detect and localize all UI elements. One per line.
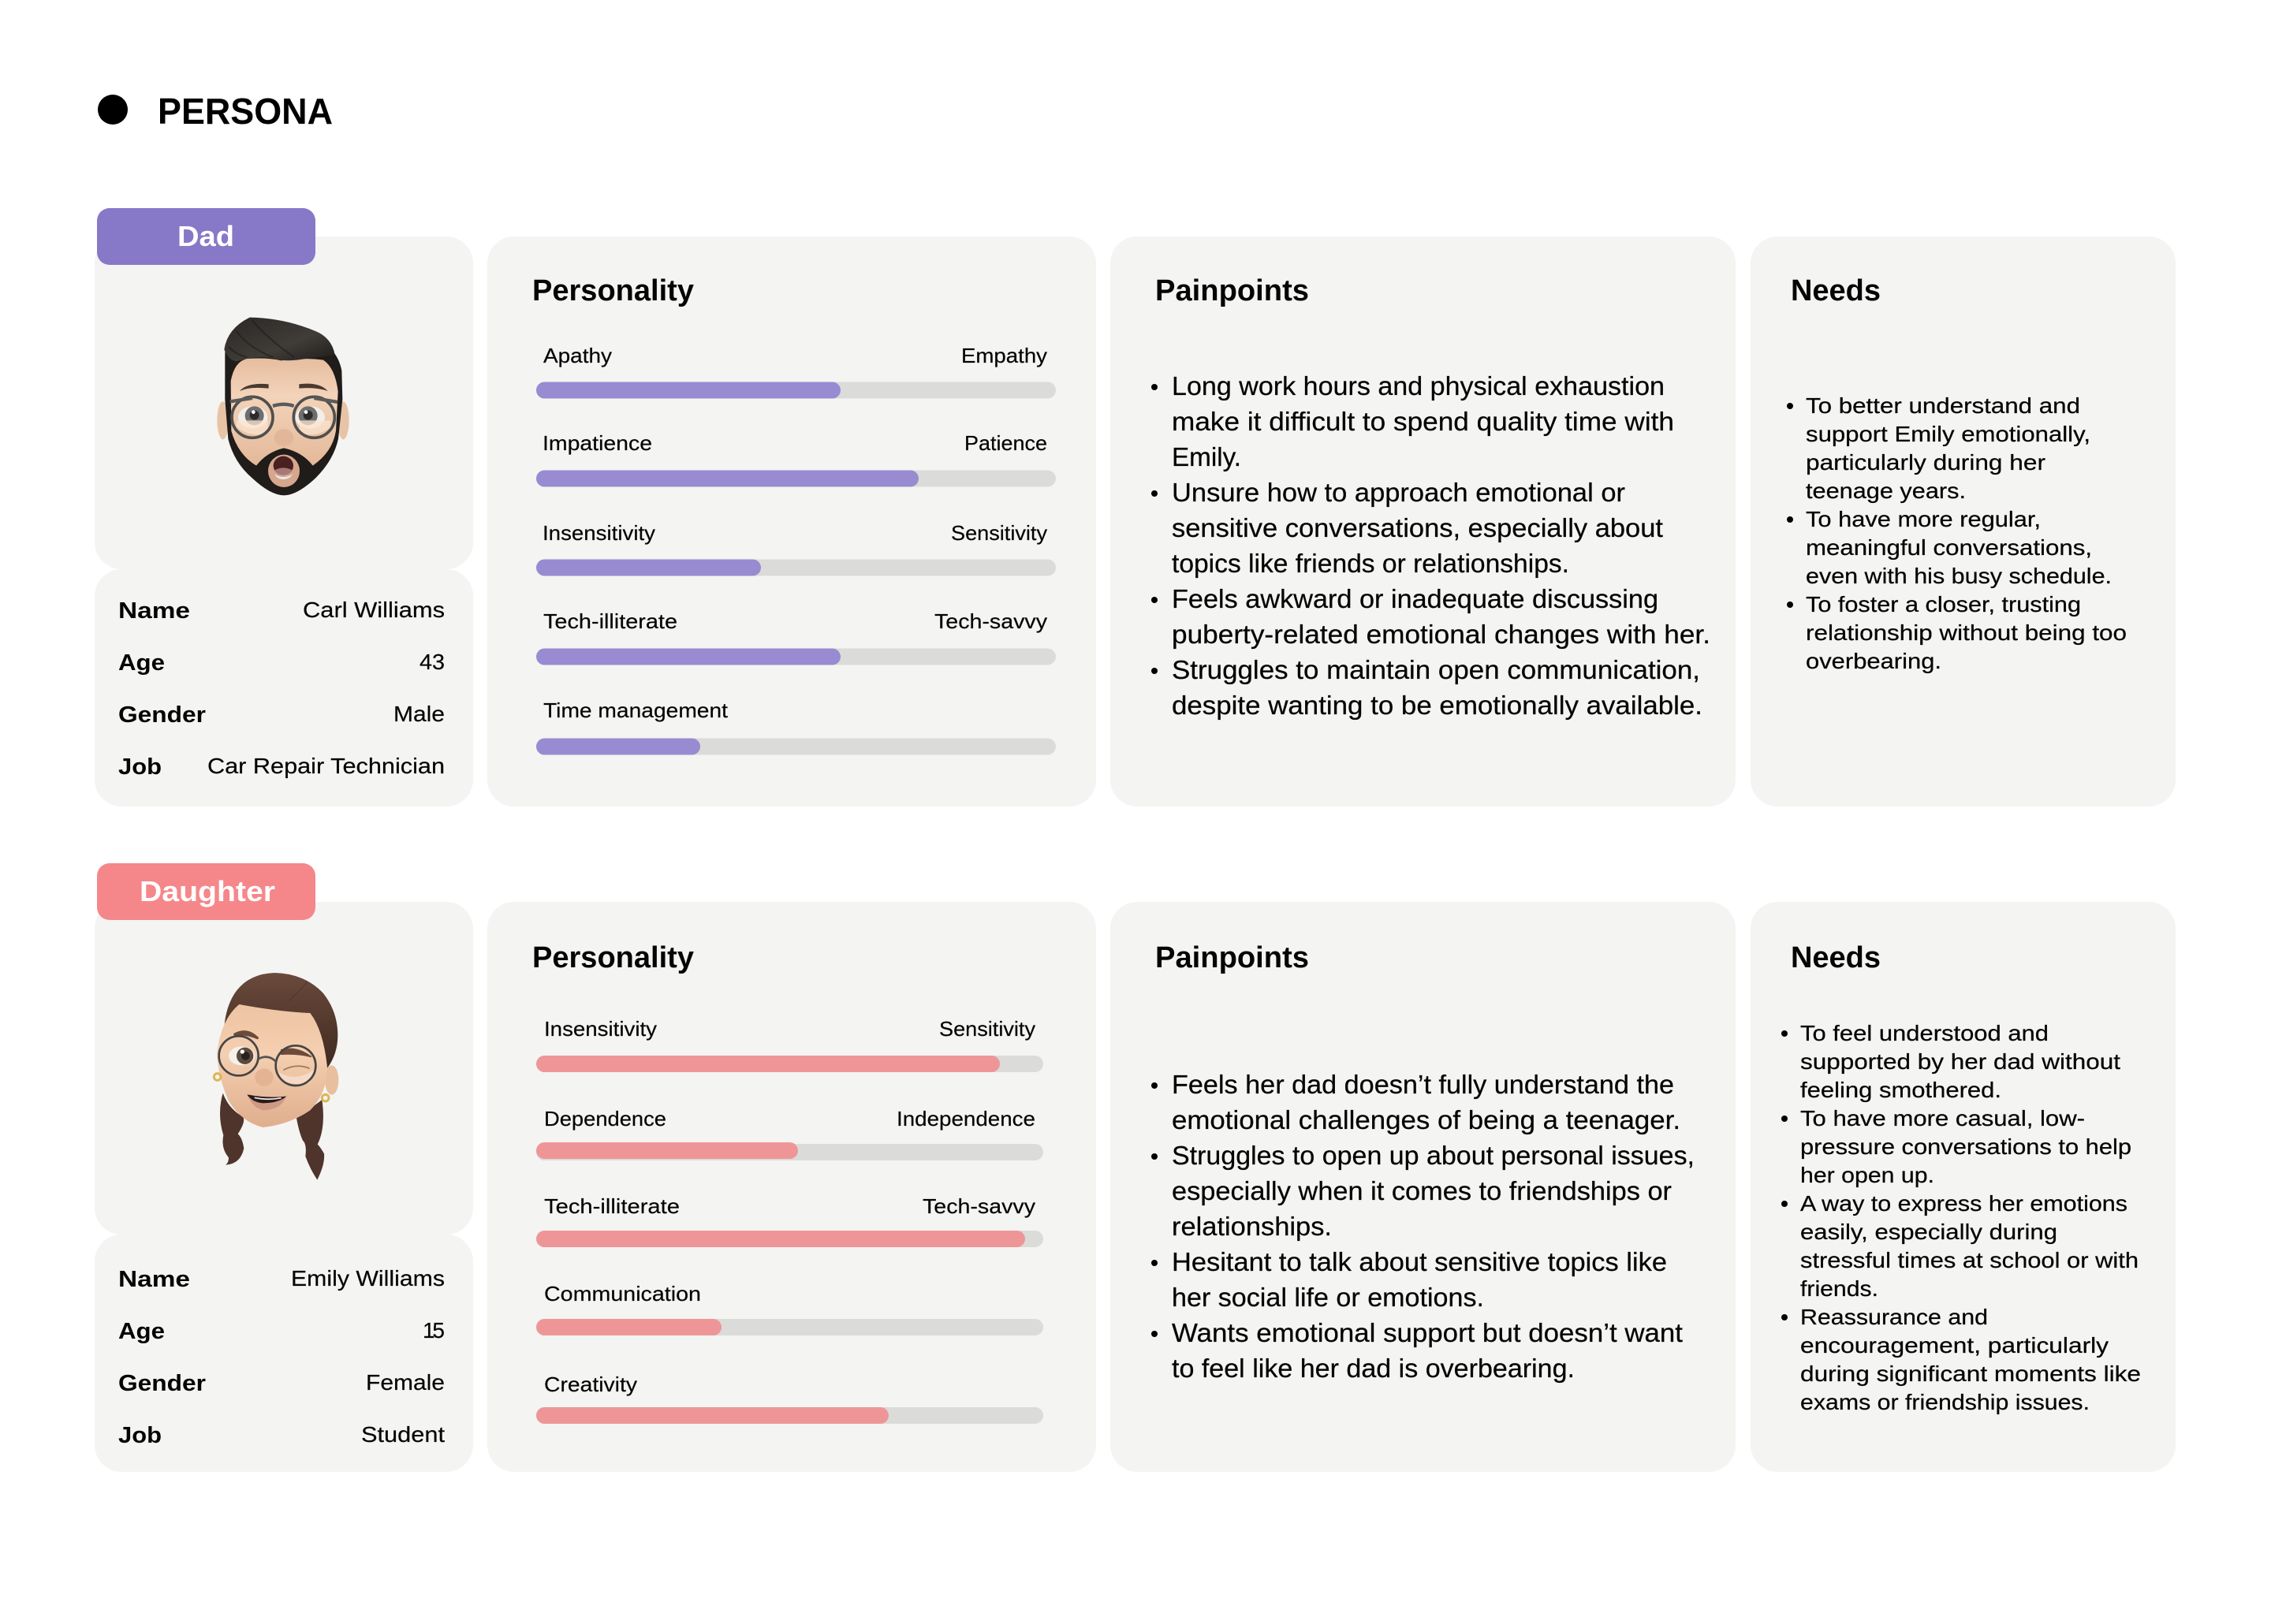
panel: Daughter persona row xyxy=(95,863,2176,1472)
panel: Dad details card: Carl Williams xyxy=(303,598,445,622)
panel: Dad needs: teenage years. xyxy=(1806,479,1966,503)
panel: Dad details card: Gender xyxy=(118,702,206,728)
panel: Dad needs: To have more regular, xyxy=(1806,507,2041,531)
panel: Dad painpoints: despite wanting to be emotionally available. xyxy=(1172,691,1702,720)
panel: Daughter details card: Job xyxy=(118,1423,162,1448)
panel: Dad painpoints: sensitive conversations, especially about xyxy=(1172,513,1663,542)
panel: Dad needs: particularly during her xyxy=(1806,450,2045,475)
panel: Daughter needs: A way to express her emotions xyxy=(1800,1191,2127,1216)
panel: Dad painpoints: Long work hours and physical exhaustion xyxy=(1172,371,1665,400)
panel: Daughter personality xyxy=(487,902,1096,1472)
panel: Daughter personality: Dependence xyxy=(544,1107,666,1130)
panel: Dad personality: Tech-illiterate xyxy=(543,609,677,633)
panel: Dad personality: Patience xyxy=(964,431,1047,455)
panel: Daughter needs: stressful times at school or with xyxy=(1800,1248,2139,1272)
panel: Daughter painpoints: especially when it comes to friendships or xyxy=(1172,1176,1672,1205)
panel: Daughter details card xyxy=(95,1235,473,1472)
panel: Dad personality: Time management xyxy=(543,698,729,722)
panel: Daughter painpoints: Struggles to open up about personal issues, xyxy=(1172,1141,1695,1170)
panel: Daughter needs: encouragement, particularly xyxy=(1800,1333,2109,1358)
panel: Daughter details card: Name xyxy=(118,1267,190,1292)
panel: Dad personality: Insensitivity xyxy=(543,521,655,545)
panel: Daughter needs: easily, especially during xyxy=(1800,1220,2057,1244)
panel: Dad details card: Job xyxy=(118,754,162,780)
panel: Daughter painpoints: relationships. xyxy=(1172,1212,1332,1241)
panel: Dad painpoints: Unsure how to approach emotional or xyxy=(1172,478,1625,507)
panel: Daughter details card: Gender xyxy=(118,1371,206,1396)
panel: Dad needs: Needs xyxy=(1791,274,1881,307)
panel: Dad painpoints: Painpoints xyxy=(1155,274,1309,307)
panel: Dad needs xyxy=(1751,237,2176,806)
panel: Daughter needs: To feel understood and xyxy=(1800,1021,2049,1045)
panel: Daughter personality: Tech-illiterate xyxy=(544,1194,680,1218)
panel: Daughter details card: Age xyxy=(118,1319,165,1344)
panel: Daughter personality: Communication xyxy=(544,1282,701,1306)
panel: Daughter needs: her open up. xyxy=(1800,1163,1934,1187)
panel: Dad personality: Tech-savvy xyxy=(934,609,1047,633)
panel: Daughter needs: To have more casual, low- xyxy=(1800,1106,2085,1130)
panel: Dad personality: Sensitivity xyxy=(951,521,1047,545)
panel: Dad needs: even with his busy schedule. xyxy=(1806,564,2112,588)
panel: Daughter details card: Student xyxy=(361,1422,445,1447)
panel: Daughter needs: during significant moments like xyxy=(1800,1361,2141,1386)
icon: Dad avatar xyxy=(217,318,349,495)
panel: Daughter painpoints: Hesitant to talk about sensitive topics like xyxy=(1172,1247,1667,1276)
panel: Dad painpoints: Struggles to maintain open communication, xyxy=(1172,655,1700,684)
panel: Daughter personality: Personality xyxy=(532,941,694,974)
panel: Dad painpoints: topics like friends or relationships. xyxy=(1172,549,1569,578)
panel: Dad personality: Impatience xyxy=(543,431,652,455)
label tag: Dad xyxy=(97,208,315,265)
panel: Dad details card: 43 xyxy=(420,650,445,674)
panel: Daughter personality: Tech-savvy xyxy=(923,1194,1035,1218)
panel: Dad details card: Age xyxy=(118,650,165,676)
panel: Daughter details card: Emily Williams xyxy=(291,1266,445,1291)
panel: Dad painpoints: Feels awkward or inadequate discussing xyxy=(1172,584,1658,613)
panel: Daughter details card: Female xyxy=(366,1370,445,1395)
panel: Dad needs: relationship without being too xyxy=(1806,620,2127,645)
panel: Daughter needs: exams or friendship issues. xyxy=(1800,1390,2090,1414)
panel: Daughter needs xyxy=(1751,902,2176,1472)
panel: Dad painpoints xyxy=(1110,237,1736,806)
panel: Dad needs: To better understand and xyxy=(1806,393,2080,418)
panel: Daughter painpoints: her social life or emotions. xyxy=(1172,1283,1484,1312)
panel: Daughter details card: 15 xyxy=(423,1318,445,1343)
panel: Daughter needs: pressure conversations to help xyxy=(1800,1134,2131,1159)
panel: Dad details card: Car Repair Technician xyxy=(207,754,445,778)
panel: Daughter painpoints: Painpoints xyxy=(1155,941,1309,974)
panel: Daughter painpoints: to feel like her dad is overbearing. xyxy=(1172,1354,1575,1383)
panel: Daughter painpoints: Feels her dad doesn’t fully understand the xyxy=(1172,1070,1674,1099)
panel: Daughter painpoints: Wants emotional support but doesn’t want xyxy=(1172,1318,1683,1347)
panel: Dad details card xyxy=(95,569,473,806)
panel: Dad painpoints: make it difficult to spend quality time with xyxy=(1172,407,1674,436)
icon: Daughter avatar xyxy=(214,973,338,1180)
title: PERSONA xyxy=(158,91,333,132)
panel: Dad details card: Name xyxy=(118,598,190,624)
panel: Daughter painpoints: emotional challenges of being a teenager. xyxy=(1172,1105,1680,1134)
panel: Dad needs: meaningful conversations, xyxy=(1806,535,2092,560)
panel: Dad personality: Personality xyxy=(532,274,694,307)
panel: Daughter needs: Reassurance and xyxy=(1800,1305,1988,1329)
label tag: Daughter xyxy=(97,863,315,920)
panel: Dad needs: support Emily emotionally, xyxy=(1806,422,2090,446)
panel: Daughter needs: friends. xyxy=(1800,1276,1878,1301)
panel: Dad personality: Empathy xyxy=(961,344,1047,367)
panel: Daughter needs: supported by her dad without xyxy=(1800,1049,2120,1074)
panel: Daughter personality: Insensitivity xyxy=(544,1017,657,1041)
panel: Daughter painpoints xyxy=(1110,902,1736,1472)
panel: Daughter personality: Creativity xyxy=(544,1373,637,1396)
label tag: Daughter: Daughter xyxy=(140,875,275,907)
panel: Daughter needs: feeling smothered. xyxy=(1800,1078,2001,1102)
panel: Daughter personality: Sensitivity xyxy=(939,1017,1035,1041)
panel: Dad needs: To foster a closer, trusting xyxy=(1806,592,2081,616)
panel: Dad personality xyxy=(487,237,1096,806)
panel: Daughter needs: Needs xyxy=(1791,941,1881,974)
panel: Daughter portrait card xyxy=(95,902,473,1235)
panel: Dad needs: overbearing. xyxy=(1806,649,1941,673)
panel: Dad details card: Male xyxy=(393,702,445,726)
panel: Dad personality: Apathy xyxy=(543,344,612,367)
label tag: Dad: Dad xyxy=(177,220,234,252)
panel: Dad painpoints: Emily. xyxy=(1172,442,1241,471)
panel: Dad painpoints: puberty-related emotional changes with her. xyxy=(1172,620,1710,649)
panel: Daughter personality: Independence xyxy=(897,1107,1035,1130)
panel: Dad persona row xyxy=(95,208,2176,806)
panel: Dad portrait card xyxy=(95,237,473,569)
